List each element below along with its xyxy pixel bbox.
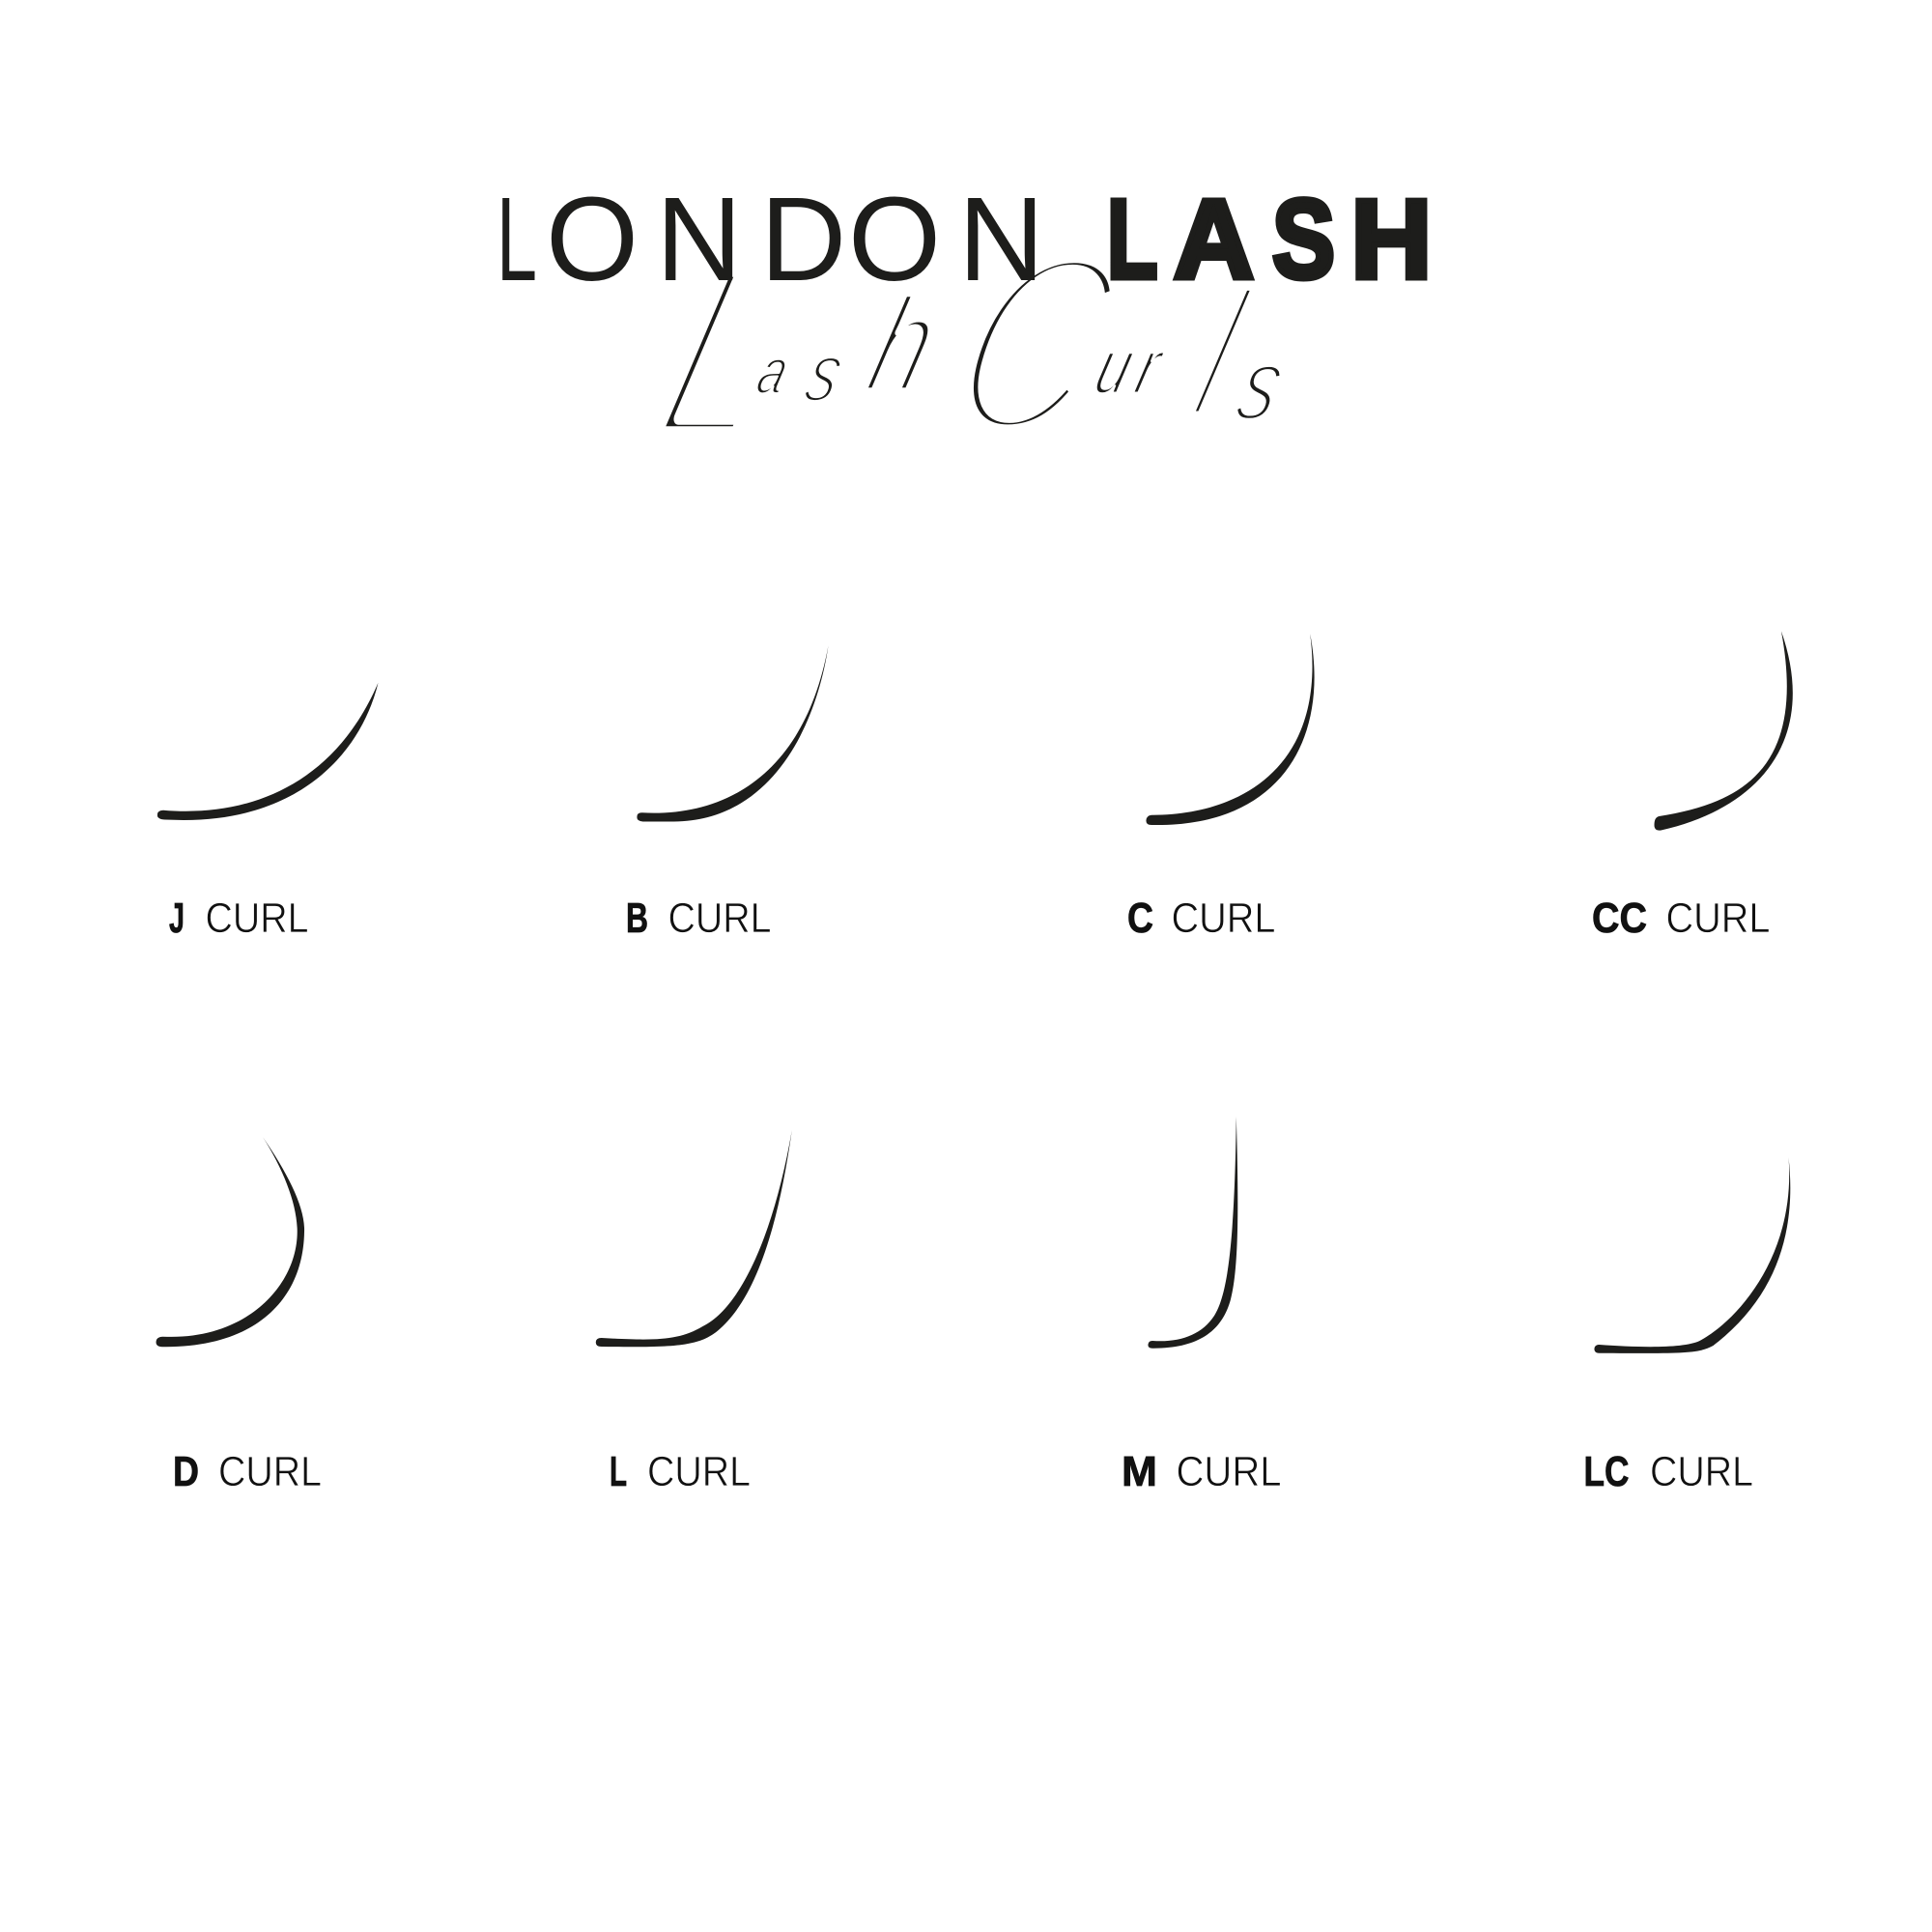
script subtitle: Lash Curls xyxy=(636,203,1331,486)
lash curve: J curl xyxy=(157,683,379,820)
label: C curl: C xyxy=(1127,895,1153,942)
label: J curl: CURL xyxy=(205,895,309,942)
script subtitle: Lash Curls: s xyxy=(1227,328,1296,441)
label: C curl: CURL xyxy=(1171,895,1275,942)
label: L curl: L xyxy=(610,1449,627,1495)
label: D curl: D xyxy=(173,1449,199,1495)
label: J curl: J xyxy=(169,895,185,942)
label: CC curl: CURL xyxy=(1665,895,1770,942)
lash curve: CC curl xyxy=(1654,631,1793,831)
lash curve: B curl xyxy=(637,645,829,821)
title word: LONDON: ONDON xyxy=(546,173,1044,306)
lash curve: LC curl xyxy=(1594,1157,1790,1353)
script subtitle: Lash Curls: s xyxy=(797,327,853,419)
title word: LASH: L xyxy=(1107,176,1157,301)
title word: LASH: S xyxy=(1272,176,1335,301)
title word: LASH: H xyxy=(1350,176,1432,301)
lash curve: C curl xyxy=(1146,634,1315,825)
title: London Lash xyxy=(497,173,1432,306)
label: CC curl: CC xyxy=(1592,895,1647,942)
script subtitle: Lash Curls: a xyxy=(750,335,797,407)
lash curve: M curl xyxy=(1148,1117,1237,1349)
label: B curl: B xyxy=(626,895,648,942)
title word: LASH: A xyxy=(1174,176,1254,301)
script subtitle: Lash Curls: C xyxy=(926,203,1144,485)
label: B curl: CURL xyxy=(668,895,771,942)
label: M curl: CURL xyxy=(1177,1449,1281,1495)
lash curve: L curl xyxy=(596,1130,792,1347)
script subtitle: Lash Curls: u xyxy=(1087,324,1143,411)
label: LC curl: LC xyxy=(1584,1449,1629,1495)
label: LC curl: CURL xyxy=(1650,1449,1753,1495)
script subtitle: Lash Curls: r xyxy=(1127,324,1173,411)
title word: LONDON: L xyxy=(497,173,537,306)
label: M curl: M xyxy=(1122,1449,1157,1495)
script subtitle: Lash Curls: h xyxy=(854,269,953,420)
label: L curl: CURL xyxy=(647,1449,751,1495)
label: D curl: CURL xyxy=(218,1449,322,1495)
lash curve: D curl xyxy=(156,1137,304,1347)
script subtitle: Lash Curls: l xyxy=(1176,252,1266,457)
script subtitle: Lash Curls: L xyxy=(636,216,812,486)
